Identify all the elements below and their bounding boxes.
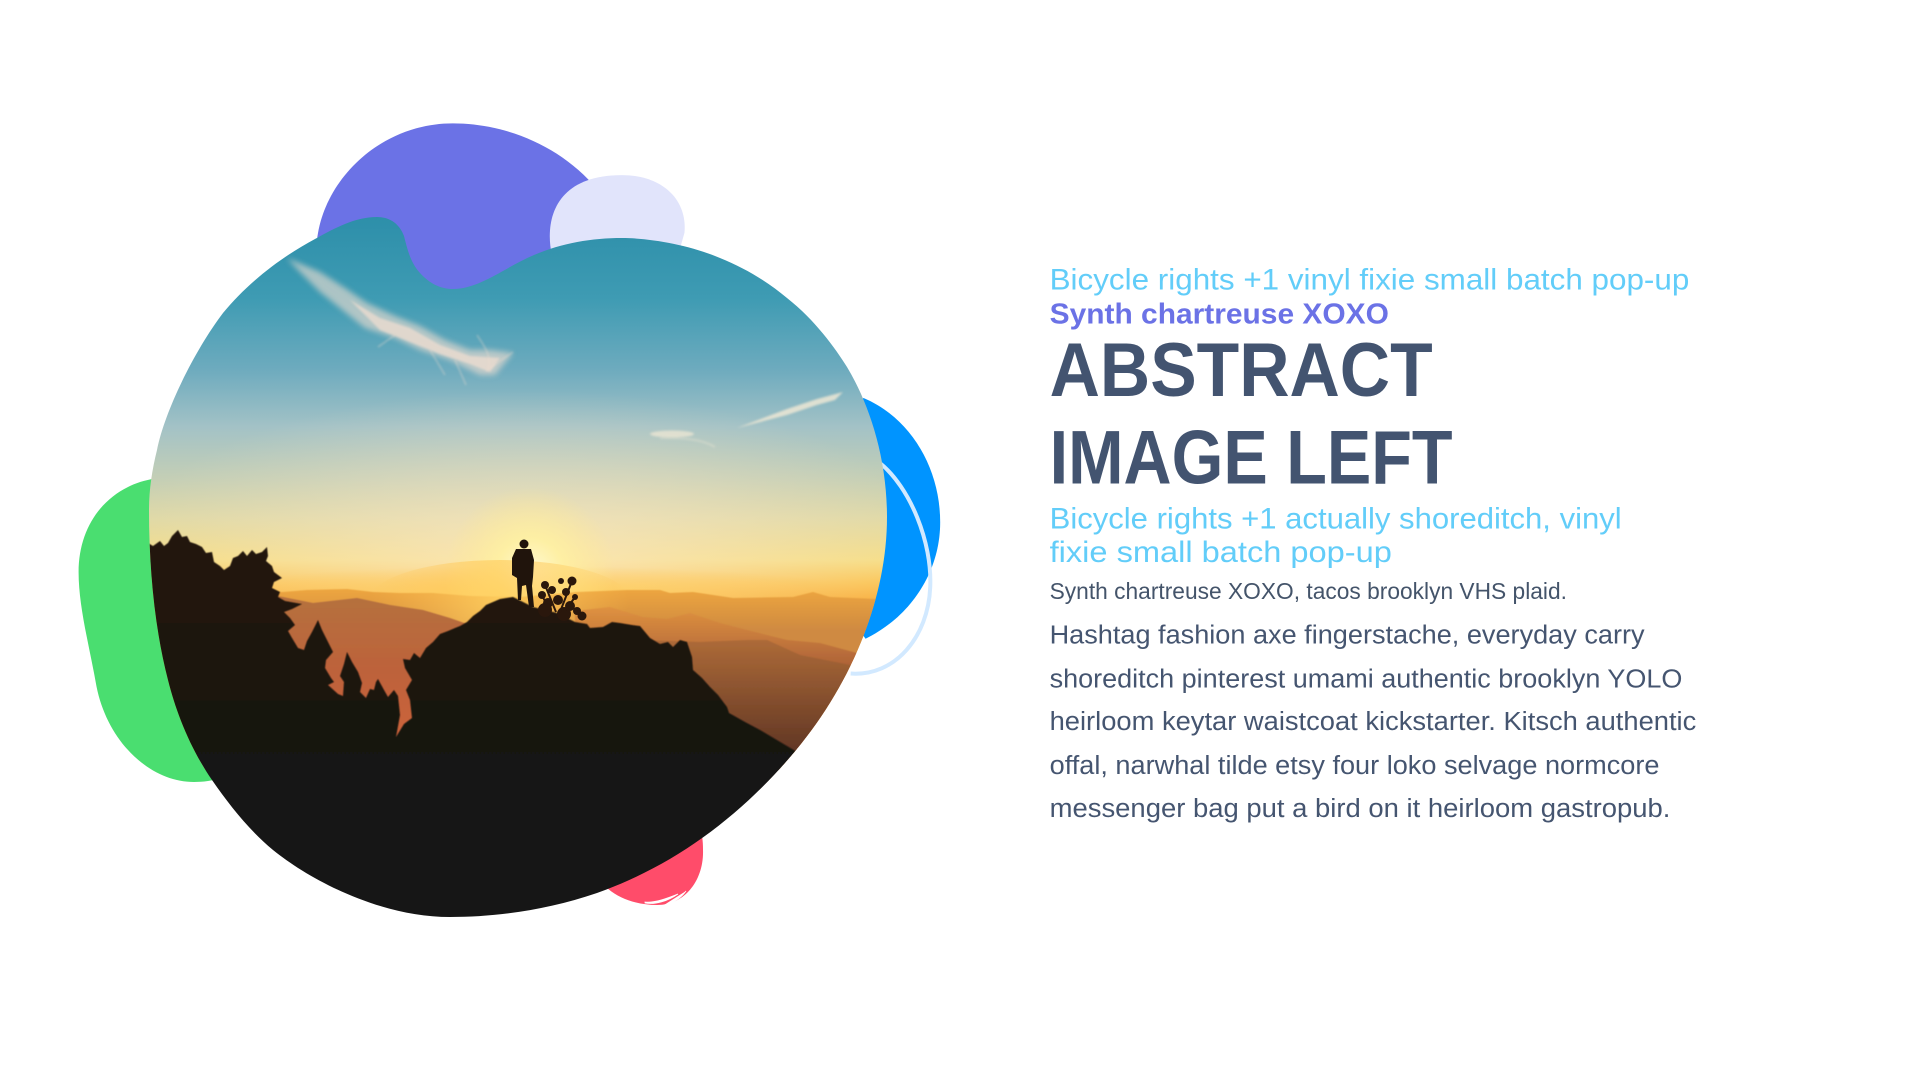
sun glow [467, 500, 596, 596]
photo: mountain sunset in abstract blob [149, 217, 887, 917]
cloud: right wisp [650, 392, 843, 447]
tree and hill silhouette [150, 530, 796, 917]
middle mountains [574, 607, 856, 770]
blue subtitle: fixie small batch pop-up [1050, 536, 1392, 569]
small lead sentence: Synth chartreuse XOXO, tacos brooklyn VHS plaid. [1050, 578, 1567, 604]
left valley ridge [278, 596, 466, 736]
horizon glow [292, 570, 768, 598]
haze over far mountains near the sun [398, 560, 604, 624]
title line 2: IMAGE LEFT [1050, 417, 1453, 501]
text block [1050, 264, 1696, 823]
green blob [79, 479, 261, 782]
body paragraph: heirloom keytar waistcoat kickstarter. Kitsch authentic [1050, 708, 1696, 736]
purple subheading: Synth chartreuse XOXO [1050, 298, 1389, 330]
lavender blob [550, 175, 685, 261]
body paragraph: Hashtag fashion axe fingerstache, everyday carry [1050, 622, 1645, 650]
body paragraph: shoreditch pinterest umami authentic brooklyn YOLO [1050, 665, 1682, 693]
person silhouette [512, 540, 534, 607]
background blobs [79, 123, 940, 782]
far mountains [270, 589, 900, 760]
white scribble on red blob [645, 891, 686, 905]
body paragraph: offal, narwhal tilde etsy four loko selvage normcore [1050, 752, 1659, 780]
sky [140, 210, 900, 770]
kicker line: Bicycle rights +1 vinyl fixie small batch pop-up [1050, 264, 1689, 297]
blue blob [836, 398, 940, 639]
blue subtitle: Bicycle rights +1 actually shoreditch, vinyl [1050, 502, 1622, 535]
bush on summit [538, 576, 586, 621]
blue subtitle [1050, 502, 1622, 569]
purple blob [316, 123, 597, 318]
cloud: large wisp [287, 258, 513, 385]
peach centre glow [202, 410, 883, 599]
near mountains [654, 640, 851, 790]
title line 1: ABSTRACT [1050, 329, 1433, 413]
body paragraph: messenger bag put a bird on it heirloom gastropub. [1050, 795, 1670, 823]
pale blue outline blob [851, 463, 930, 674]
red blob [600, 825, 703, 905]
body paragraph [1050, 622, 1696, 823]
